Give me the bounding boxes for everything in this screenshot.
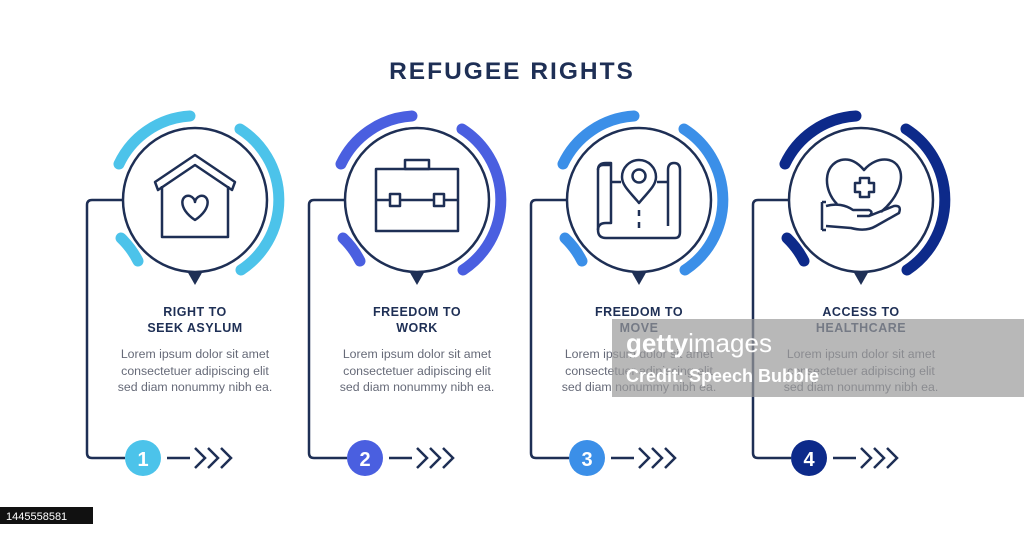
body text: sed diam nonummy nibh ea. [784, 380, 938, 394]
watermark band [612, 319, 1024, 397]
body text [784, 347, 938, 394]
body text: Lorem ipsum dolor sit amet [121, 347, 270, 361]
ring arcs [119, 116, 279, 270]
step 3: MOVE [620, 321, 658, 335]
title: REFUGEE RIGHTS [389, 58, 635, 85]
connector [309, 200, 347, 458]
icon: map with pin [598, 160, 680, 238]
body text: Lorem ipsum dolor sit amet [787, 347, 936, 361]
heading: ACCESS TO [822, 305, 900, 319]
number badge [569, 440, 605, 476]
image id tag [0, 507, 93, 524]
body text: sed diam nonummy nibh ea. [340, 380, 494, 394]
number badge [125, 440, 161, 476]
step 2: 2 [359, 449, 371, 471]
body text: Lorem ipsum dolor sit amet [343, 347, 492, 361]
watermark band: gettyimages [626, 328, 772, 358]
heading: FREEDOM TO [373, 305, 461, 319]
body text: Lorem ipsum dolor sit amet [565, 347, 714, 361]
arrow chevrons [389, 448, 453, 468]
ring arcs [341, 116, 501, 270]
circle [345, 128, 489, 272]
number badge [347, 440, 383, 476]
body text [562, 347, 716, 394]
body text [118, 347, 272, 394]
connector [753, 200, 791, 458]
step 2 [309, 116, 501, 476]
icon: house with heart [155, 155, 235, 237]
arrow chevrons [611, 448, 675, 468]
heading: FREEDOM TO [595, 305, 683, 319]
connector [531, 200, 569, 458]
step 1: 1 [137, 449, 149, 471]
icon: hand holding heart [822, 160, 901, 230]
body text: sed diam nonummy nibh ea. [562, 380, 716, 394]
step 2: WORK [396, 321, 438, 335]
body text: consectetuer adipiscing elit [787, 364, 935, 378]
step 1: SEEK ASYLUM [147, 321, 243, 335]
step 3 [531, 116, 723, 476]
icon: briefcase [376, 160, 458, 231]
watermark band: Credit: Speech Bubble [626, 366, 819, 386]
ring arcs [785, 116, 945, 270]
image id tag: 1445558581 [6, 511, 67, 523]
body text [340, 347, 494, 394]
arrow chevrons [167, 448, 231, 468]
number badge [791, 440, 827, 476]
circle [789, 128, 933, 272]
step 1 [87, 116, 279, 476]
body text: sed diam nonummy nibh ea. [118, 380, 272, 394]
body text: consectetuer adipiscing elit [343, 364, 491, 378]
step 3: 3 [581, 449, 593, 471]
ring arcs [563, 116, 723, 270]
body text: consectetuer adipiscing elit [565, 364, 713, 378]
arrow chevrons [833, 448, 897, 468]
connector [87, 200, 125, 458]
circle [567, 128, 711, 272]
circle [123, 128, 267, 272]
step 4: HEALTHCARE [816, 321, 906, 335]
heading: RIGHT TO [163, 305, 227, 319]
body text: consectetuer adipiscing elit [121, 364, 269, 378]
step 4 [753, 116, 945, 476]
step 4: 4 [803, 449, 815, 471]
